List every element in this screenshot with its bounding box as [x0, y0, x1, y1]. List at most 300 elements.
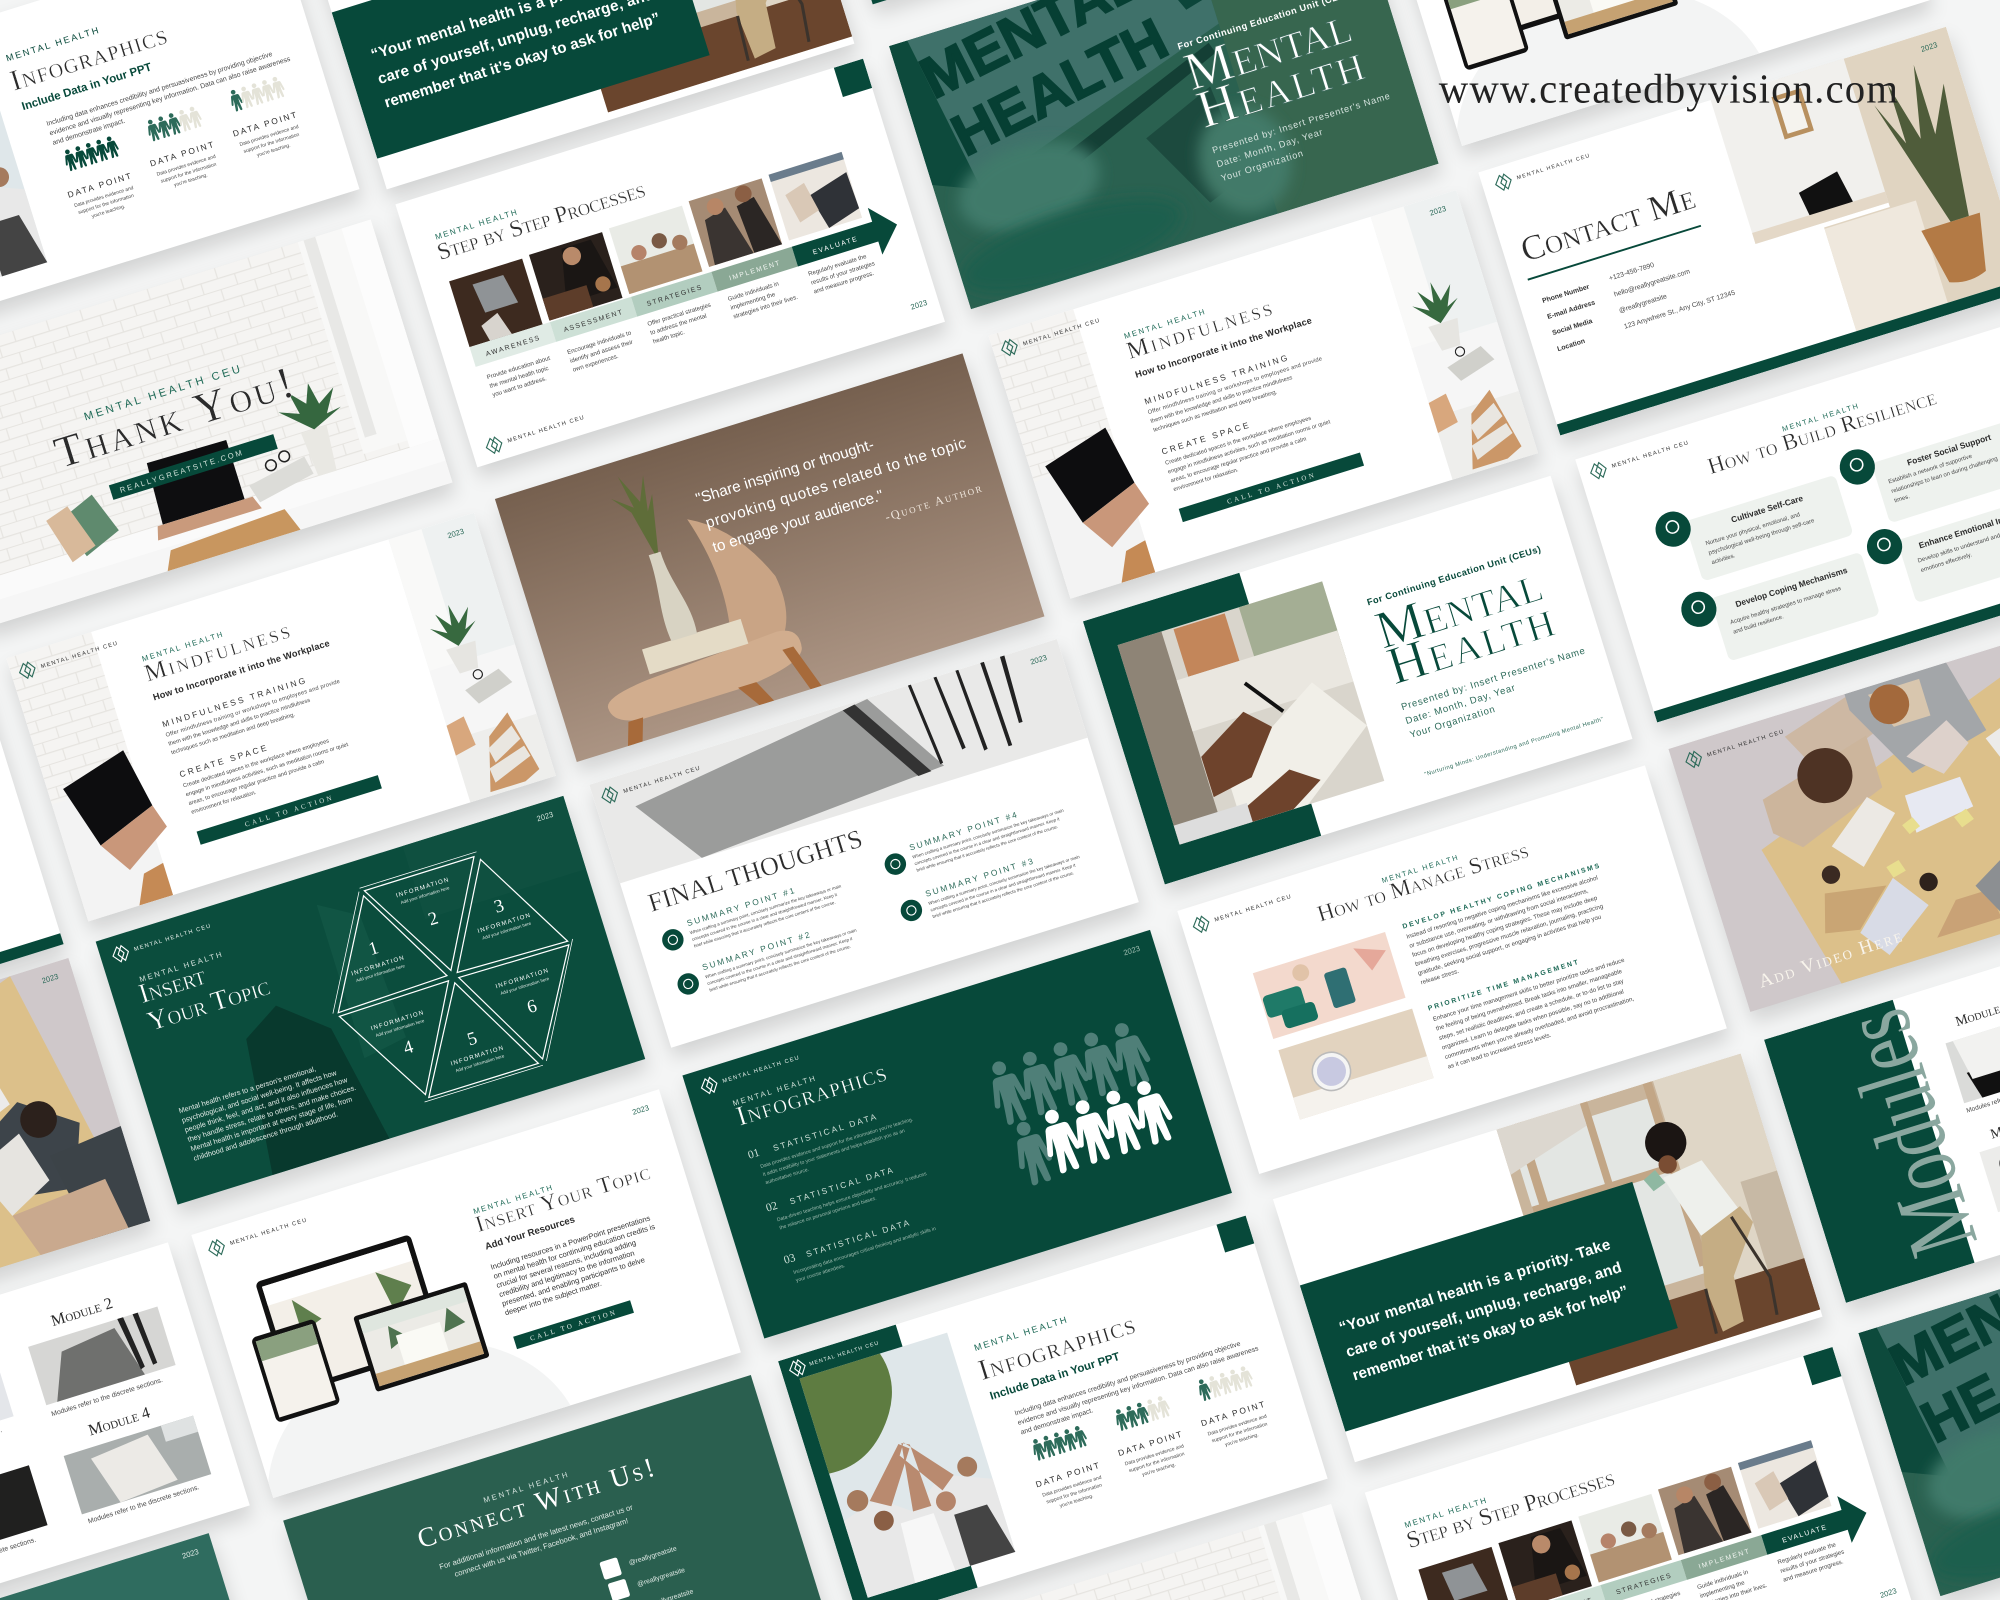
slide: step by step bottom: IMPLEMENT [1698, 1548, 1751, 1571]
hexagon labels: 6 [524, 995, 539, 1017]
slide: mental health cover white [1083, 476, 1636, 895]
arrow steps [470, 208, 897, 367]
slide: step by step top: Step by Step Processes [434, 177, 649, 266]
body: Including data enhances credibility and persuasiveness by providing objective [46, 51, 274, 128]
slide: infographics top-left: Data provides evidence and [74, 185, 134, 209]
body: crucial for several reasons, including adding [495, 1238, 637, 1290]
descriptions: Guide individuals in [1696, 1569, 1749, 1591]
summary points: SUMMARY POINT #3 [924, 855, 1036, 899]
slide: infographics with photo: Infographics [975, 1308, 1139, 1387]
slide: contact me: @reallygreatsite [1618, 293, 1668, 315]
body: psychological, and social well-being. It affects how [181, 1068, 338, 1125]
slide: mindfulness middle: them with the knowledge and skills to practice mindfulness [1150, 375, 1293, 425]
slide: infographics dark: 01 [747, 1147, 761, 1162]
heading: MENTAL HEALTH [973, 1314, 1070, 1353]
logo [486, 415, 584, 454]
hexagon labels: Add your information here [455, 1053, 505, 1073]
slide: thank you bottom [864, 1504, 1416, 1600]
hexagon labels: Add your information here [375, 1018, 425, 1038]
slide: how to manage stress: gratitude, seeking social support, or engaging in activities that help you [1417, 914, 1602, 977]
slide: resilience: Establish a network of supportive [1888, 454, 1974, 485]
slide: step by step bottom: 2023 [1879, 1586, 1898, 1600]
slide: how to manage stress: How to Manage Stress [1314, 837, 1531, 927]
slide: how to manage stress: as it can lead to increased stress levels. [1447, 1032, 1552, 1071]
slide: resilience: relationships to lean on during challenging [1891, 456, 1999, 495]
descriptions: results of your strategies [810, 260, 876, 287]
notebook and pens photo [589, 639, 1088, 883]
slide: teal corner bottom-left: 2023 [181, 1547, 200, 1561]
descriptions: implementing the [1699, 1579, 1746, 1600]
logo [1588, 435, 1691, 480]
pictograms [65, 136, 119, 172]
module 4: Module 4 [86, 1404, 152, 1439]
logo [1191, 889, 1294, 934]
call to action button [197, 775, 382, 845]
slide: how to manage stress: commitments when you're already overloaded, and avoid procrastination, [1444, 995, 1635, 1061]
slide: mindfulness middle: 2023 [1428, 204, 1447, 218]
slide: contact me [1478, 27, 2000, 446]
hexagon labels: 2 [426, 907, 440, 929]
title: FINAL THOUGHTS [645, 824, 866, 918]
data point labels: DATA POINT [1200, 1399, 1267, 1428]
slide: modules lower left: Modules refer to the discrete sections. [51, 1377, 164, 1418]
slide: connect with us [283, 1375, 836, 1600]
photos [447, 152, 864, 347]
slide: final thoughts: When crafting a summary point, concisely summarize the key takeaways or main [689, 883, 842, 935]
slide: teal corner bottom-left [0, 1533, 294, 1600]
descriptions: Encourage individuals to [566, 329, 633, 356]
descriptions: implementing the [730, 291, 777, 312]
slide: how to manage stress: release stress. [1420, 968, 1460, 986]
descriptions: results of your strategies [1780, 1548, 1845, 1575]
photos [1711, 27, 2000, 352]
slide: cover dark bottom-right [1851, 1162, 2000, 1600]
summary points [684, 809, 1037, 973]
slide: contact me left bar [0, 681, 67, 1100]
summary points: SUMMARY POINT #1 [686, 885, 797, 928]
slide: mindfulness middle: Offer mindfulness training or workshops to employees and provide [1147, 356, 1323, 416]
slide: infographics top-left: Data provides evidence and [239, 124, 300, 148]
body: they handle stress, relate to others, and make choices. [186, 1083, 357, 1144]
slide: how to manage stress: Instead of resorting to negative coping mechanisms like excessive alcohol [1406, 875, 1599, 941]
slide: infographics with photo: support for the information [1211, 1421, 1268, 1444]
body: deeper into the subject matter. [504, 1279, 603, 1317]
body: evidence and visually representing key information. Data can also raise awareness [49, 56, 292, 137]
heading: MENTAL HEALTH [434, 207, 520, 242]
statistics: STATISTICAL DATA [772, 1111, 879, 1153]
slide: step by step top: AWARENESS [485, 335, 542, 358]
slide: infographics top-left [0, 0, 363, 345]
slide: final thoughts: brief while ensuring that it accurately reflects the core content of the course. [916, 824, 1059, 873]
slide: mindfulness middle: Mindfulness [1123, 294, 1275, 365]
body: Mental health refers to a person's emotional, [178, 1064, 317, 1115]
quote text: "Share inspiring or thought- [694, 436, 876, 508]
descriptions [485, 251, 879, 399]
slide: step by step top: ASSESSMENT [563, 309, 625, 334]
body: evidence and visually representing key information. Data can also raise awareness [1017, 1345, 1260, 1427]
slide: step by step bottom: Step by Step Processes [1403, 1465, 1618, 1554]
slide: infographics dark: Data provides evidence and support for the information you're teaching. [760, 1117, 914, 1170]
logo: MENTAL HEALTH CEU [1022, 318, 1101, 348]
slide: insert your topic (top devices) [1410, 0, 1935, 158]
slide: mindfulness left: Mindfulness [141, 617, 293, 688]
slide: infographics with photo: Data provides evidence and [1042, 1475, 1103, 1499]
data point labels: DATA POINT [66, 170, 134, 200]
slide: mindfulness middle: CALL TO ACTION [1226, 472, 1317, 506]
slide: modules lower left [0, 1242, 253, 1600]
slide: resilience: times. [1894, 494, 1911, 504]
body: presented, and enabling participants to delve [501, 1255, 646, 1308]
hexagon labels: INFORMATION [370, 1009, 425, 1032]
slide: mindfulness left: CALL TO ACTION [244, 794, 335, 829]
social icons [599, 1556, 639, 1600]
slide: infographics with photo: you're teaching. [1141, 1462, 1177, 1478]
slide: mindfulness left: Offer mindfulness training or workshops to employees and provide [165, 679, 341, 739]
slide: resilience: Cultivate Self-Care [1730, 493, 1804, 525]
slide: mindfulness middle [989, 190, 1541, 609]
slide: meeting photo left: 2023 [41, 972, 60, 985]
quote box [332, 0, 710, 159]
slide: quote top [305, 0, 858, 200]
quote text: to engage your audience." [710, 487, 886, 556]
slide: contact me: 123 Anywhere St., Any City, ST 12345 [1623, 290, 1736, 331]
slide: mindfulness middle: Create dedicated spaces in the workplace where employees [1165, 416, 1312, 467]
heading: MENTAL HEALTH [1123, 307, 1207, 341]
slide: quote woman: remember that it’s okay to ask for help” [1350, 1283, 1630, 1385]
logo [1493, 148, 1593, 192]
statistics: STATISTICAL DATA [805, 1217, 912, 1259]
slide: insert your topic white: Add Your Resources [484, 1214, 576, 1253]
slide: infographics with photo: you're teaching. [1059, 1493, 1094, 1509]
slide: resilience corner bar top [791, 0, 1344, 15]
slide: mindfulness left: environment for relaxation. [191, 790, 257, 816]
logo: MENTAL HEALTH CEU [133, 923, 212, 953]
slide: infographics dark: the reliance on personal opinions and biases. [779, 1196, 877, 1231]
slide: infographics dark: It adds credibility to your statements and helps establish you as an [762, 1128, 906, 1178]
statistics: STATISTICAL DATA [788, 1164, 896, 1206]
slide: step by step bottom [1365, 1347, 1918, 1600]
descriptions: health topic. [652, 329, 686, 345]
slide: connect with us: @reallygreatsite [628, 1545, 678, 1567]
slide: meeting photo left [0, 958, 154, 1377]
slide: final thoughts: concepts covered in the course in a clear and straightforward manner. Keep it [914, 816, 1061, 866]
slide: mindfulness left: them with the knowledge and skills to practice mindfulness [168, 698, 311, 748]
cards [1684, 416, 2000, 662]
hexagon labels: Add your information here [482, 921, 532, 941]
logo: MENTAL HEALTH CEU [1214, 894, 1293, 924]
descriptions: and measure progress. [813, 270, 875, 295]
data point labels: DATA POINT [149, 139, 216, 169]
slide: mindfulness left: How to Incorporate it into the Workplace [152, 638, 331, 702]
hexagon labels: INFORMATION [477, 912, 532, 935]
slide: mindfulness left: Create dedicated spaces in the workplace where employees [182, 738, 330, 789]
slide: infographics with photo: Data provides evidence and [1207, 1413, 1268, 1438]
heading: Contact Me [1516, 177, 1700, 270]
slide: cover dark: Presented by: Insert Presenter's Name [1211, 91, 1392, 155]
slide: infographics with photo [778, 1214, 1331, 1600]
slide: mindfulness middle: How to Incorporate it into the Workplace [1134, 315, 1313, 380]
hexagon labels: 1 [366, 937, 381, 959]
data point labels: DATA POINT [232, 109, 299, 139]
body: and demonstrate impact. [1020, 1407, 1094, 1436]
slide: infographics dark: authoritative source. [765, 1167, 810, 1186]
slide: infographics with photo: support for the information [1046, 1482, 1103, 1505]
slide: contact me: 2023 [1920, 40, 1939, 54]
slide: resilience: How to Build Resilience [1705, 384, 1939, 479]
quote box [1300, 1182, 1678, 1432]
slide: quote woman [1273, 1054, 1826, 1473]
slide: infographics top-left: you're teaching. [173, 172, 208, 188]
slide: final thoughts: brief while ensuring that it accurately reflects the core content of the course. [932, 870, 1075, 919]
data point labels [64, 109, 302, 200]
slide: add video [1668, 603, 2000, 1022]
slide: mental health cover white: Health [1380, 588, 1561, 696]
clock photo [1278, 1009, 1434, 1120]
logo: MENTAL HEALTH CEU [40, 640, 119, 670]
heading: MENTAL HEALTH [5, 25, 101, 63]
descriptions: Regularly evaluate the [807, 253, 868, 278]
heading: MENTAL HEALTH [1781, 401, 1861, 434]
slide: infographics dark: Infographics [732, 1056, 890, 1132]
slide: how to manage stress: Enhance your time management skills to better prioritize tasks and reduce [1432, 957, 1626, 1023]
heading: MENTAL HEALTH [472, 1183, 555, 1216]
slide: step by step top: IMPLEMENT [728, 260, 782, 282]
logo [111, 918, 214, 964]
descriptions [1616, 1540, 1848, 1600]
slide: final thoughts: brief while ensuring that it accurately reflects the core content of the course. [693, 900, 836, 948]
watermark: www.createdbyvision.com [1439, 66, 1898, 111]
slide: infographics dark [682, 930, 1235, 1349]
hexagon labels: INFORMATION [450, 1044, 505, 1068]
vertical title: Modules [1819, 998, 1999, 1268]
slide: step by step top: 2023 [909, 298, 928, 312]
body [178, 1054, 363, 1163]
data point labels [1032, 1399, 1270, 1489]
slide: step by step top: STRATEGIES [646, 284, 704, 308]
body: connect with us via Twitter, Facebook, and Instagram! [453, 1516, 629, 1579]
descriptions: to address the mental [649, 313, 708, 337]
data point labels: DATA POINT [1034, 1460, 1102, 1489]
logo: MENTAL HEALTH CEU [507, 415, 586, 444]
slide: infographics dark: your course attendees. [795, 1263, 846, 1284]
slide: mindfulness middle: environment for relaxation. [1173, 467, 1240, 493]
slide: mental health cover white: Mental [1368, 553, 1549, 661]
slide: insert your topic white: Insert Your Topic [472, 1159, 653, 1237]
section 2: CREATE SPACE [1160, 419, 1252, 457]
logo: MENTAL HEALTH CEU [1706, 729, 1785, 759]
descriptions: the mental health topic [489, 365, 550, 390]
heading: MENTAL HEALTH [141, 629, 225, 664]
summary points: SUMMARY POINT #2 [701, 929, 813, 972]
slide: quote brown: -Quote Author [883, 481, 983, 524]
heading: MENTAL HEALTH [1403, 1496, 1489, 1530]
slide: resilience [1575, 314, 2000, 733]
slide: connect with us: Connect With Us! [413, 1451, 658, 1554]
slide: resilience: Foster Social Support [1906, 432, 1992, 467]
slide: mental health cover white: "Nurturing Minds: Understanding and Promoting Mental Health" [1424, 717, 1604, 778]
body [489, 1213, 668, 1317]
slide: resilience: Develop Coping Mechanisms [1734, 565, 1849, 609]
hexagon labels: INFORMATION [395, 876, 450, 899]
hexagon labels [332, 856, 570, 1094]
slide: insert your topic white: 2023 [631, 1103, 650, 1117]
slide: infographics top-left: Include Data in Your PPT [20, 61, 153, 113]
data point labels: DATA POINT [1117, 1428, 1185, 1458]
descriptions: Provide education about [486, 355, 551, 381]
slide: resilience: and build resilience. [1733, 614, 1785, 636]
slide: final thoughts: concepts covered in the course in a clear and straightforward manner. Keep it [691, 892, 838, 942]
section 1: MINDFULNESS TRAINING [1143, 352, 1291, 407]
slide: contact me: hello@reallygreatsite.com [1613, 268, 1691, 299]
slide: insert your topic dark: Insert [135, 959, 209, 1009]
slide: infographics dark: Incorporating data encourages critical thinking and analytic skills in [793, 1226, 937, 1276]
slide: step by step bottom: EVALUATE [1781, 1524, 1829, 1545]
slide: how to manage stress: or substance use, overeating, or withdrawing from social interactions, [1409, 887, 1590, 950]
slide: mindfulness middle: engage in mindfulness activities, such as meditation rooms or quiet [1167, 419, 1332, 476]
dumbbell photo [1253, 932, 1406, 1039]
contact details [1542, 283, 1606, 353]
logo: MENTAL HEALTH CEU [229, 1217, 308, 1247]
quote text [694, 410, 976, 557]
slide: contact me: +123-456-7890 [1608, 262, 1655, 283]
body: Including data enhances credibility and persuasiveness by providing objective [1014, 1340, 1242, 1417]
body: For additional information and the latest news, contact us or [438, 1503, 634, 1571]
slide: mindfulness left: 2023 [446, 527, 465, 540]
call to action button [1179, 452, 1364, 522]
slide: infographics with photo: support for the information [1128, 1451, 1186, 1474]
slide: mindfulness middle: techniques such as meditation and deep breathing. [1153, 389, 1278, 434]
logo [1000, 312, 1102, 357]
slide: resilience: Acquire healthy strategies to manage stress [1730, 586, 1842, 626]
section 1: DEVELOP HEALTHY COPING MECHANISMS [1402, 862, 1602, 931]
slide: infographics top-left: Infographics [6, 19, 171, 97]
slide: how to manage stress: breathing exercises, progressive muscle relaxation, journaling, practicing [1414, 903, 1604, 968]
slide: mental health cover white: Date: Month, Day, Year [1404, 682, 1517, 727]
slide: how to manage stress: steps, set realistic deadlines, and create a schedule, or to-do list to stay [1438, 978, 1626, 1042]
call to action [513, 1300, 634, 1349]
slide: quote top: remember that it’s okay to ask for help” [382, 10, 662, 112]
slide: final thoughts: When crafting a summary point, concisely summarize the key takeaways or main [705, 927, 858, 979]
slide: final thoughts [589, 639, 1142, 1058]
hexagon labels: Add your information here [500, 976, 550, 996]
cover text: For Continuing Education Unit (CEUs) [1366, 544, 1542, 607]
slide: mindfulness left: areas, to encourage regular practice and provide a calm [188, 759, 325, 807]
summary icons [658, 850, 926, 998]
slide: modules right [1764, 894, 2000, 1313]
quote text: provoking quotes related to the topic [704, 435, 968, 532]
slide: resilience: emotions effectively. [1920, 552, 1973, 574]
hexagon labels: 5 [465, 1028, 479, 1049]
logo [787, 1335, 881, 1378]
logo [600, 760, 703, 805]
big background words: HEALTH [942, 6, 1178, 169]
clipboard photo [1118, 581, 1384, 845]
slide: mental health cover white: Your Organization [1409, 704, 1497, 741]
arrow steps [1435, 1489, 1874, 1600]
summary points: SUMMARY POINT #4 [908, 809, 1020, 853]
section 1: MINDFULNESS TRAINING [161, 675, 309, 729]
slide: how to manage stress: the feeling of being overwhelmed. Break tasks into smaller, manageable [1435, 968, 1624, 1033]
hexagon labels: 3 [492, 895, 506, 917]
slide: step by step top: EVALUATE [812, 236, 859, 256]
module 1 and 3 fragments [0, 1356, 14, 1456]
descriptions: identify and assess their [569, 339, 634, 365]
slide: infographics dark: 03 [782, 1252, 797, 1267]
slide: infographics dark: Data-driven teaching helps ensure objectivity and accuracy. It reduces [776, 1171, 928, 1223]
slide: resilience: psychological well-being through self-care [1708, 518, 1816, 557]
slide: infographics top-left: support for the information [243, 132, 300, 155]
slide: final thoughts: When crafting a summary point, concisely summarize the key takeaways or main [912, 808, 1065, 860]
slide: final thoughts: concepts covered in the course in a clear and straightforward manner. Keep it [930, 862, 1077, 912]
heading: MENTAL HEALTH CEU [83, 363, 244, 423]
slide: cover dark: Your Organization [1220, 148, 1305, 183]
slide: quote woman: “Your mental health is a priority. Take [1337, 1236, 1613, 1337]
hexagon labels: INFORMATION [495, 967, 550, 990]
slide: mindfulness left: techniques such as meditation and deep breathing. [171, 712, 296, 756]
slide: infographics top-left: you're teaching. [256, 143, 291, 159]
slide: how to manage stress [1177, 765, 1730, 1184]
slide: insert your topic dark [96, 796, 648, 1215]
slide: cover dark: Date: Month, Day, Year [1215, 127, 1324, 169]
slide: thank you: REALLYGREATSITE.COM [119, 448, 245, 495]
slide: step by step bottom: STRATEGIES [1615, 1572, 1673, 1596]
body: childhood and adolescence through adulthood. [192, 1109, 339, 1163]
slide: insert your topic white [184, 1089, 786, 1600]
section 2: PRIORITIZE TIME MANAGEMENT [1427, 959, 1581, 1013]
pictograms [1030, 1424, 1089, 1462]
slide: infographics with photo: Include Data in Your PPT [989, 1351, 1121, 1403]
slide: final thoughts: brief while ensuring that it accurately reflects the core content of the course. [709, 944, 851, 993]
slide: how to manage stress: organized. Learn to delegate tasks when possible, say no to additional [1441, 988, 1625, 1052]
slide: infographics top-left: support for the information [160, 162, 217, 185]
slide: insert your topic white: CALL TO ACTION [529, 1309, 618, 1343]
descriptions: strategies into their lives. [732, 294, 799, 320]
contact details: Phone Number [1542, 284, 1591, 305]
body: and demonstrate impact. [52, 118, 126, 147]
descriptions: own experiences. [572, 353, 620, 374]
slide: insert your topic dark: 2023 [536, 810, 554, 823]
slide: infographics with photo: you're teaching. [1224, 1432, 1259, 1448]
slide: quote brown [495, 353, 1048, 772]
logo: MENTAL HEALTH CEU [722, 1055, 801, 1085]
chair and vase photo [543, 437, 822, 748]
slide: quote woman: care of yourself, unplug, recharge, and [1344, 1259, 1624, 1361]
statistics [772, 1111, 912, 1259]
slide: final thoughts: 2023 [1029, 653, 1048, 667]
logo [207, 1212, 310, 1258]
photos [1416, 1440, 1834, 1600]
slide: cover dark [881, 0, 1442, 319]
slide: infographics dark: 2023 [1122, 944, 1141, 957]
slide: step by step top [395, 59, 948, 478]
hexagon diagram [300, 832, 606, 1120]
logo: MENTAL HEALTH CEU [1516, 153, 1591, 181]
logo [17, 635, 120, 680]
website strip [109, 434, 278, 500]
slide: mindfulness left: engage in mindfulness activities, such as meditation rooms or quiet [185, 742, 349, 798]
hexagon labels: INFORMATION [350, 954, 406, 977]
module 2: Module 2 [49, 1295, 115, 1330]
heading: MENTAL HEALTH [732, 1073, 818, 1108]
heading: MENTAL HEALTH [138, 949, 225, 984]
slide: mental health cover white: Presented by: Insert Presenter's Name [1400, 645, 1587, 713]
device mockups [203, 1203, 618, 1600]
body: on mental health for continuing education credits is [492, 1222, 656, 1281]
logo: MENTAL HEALTH CEU [1611, 440, 1690, 470]
descriptions: you want to address. [492, 375, 548, 399]
contact details: Social Media [1552, 318, 1594, 337]
descriptions: Regularly evaluate the [1777, 1541, 1837, 1566]
